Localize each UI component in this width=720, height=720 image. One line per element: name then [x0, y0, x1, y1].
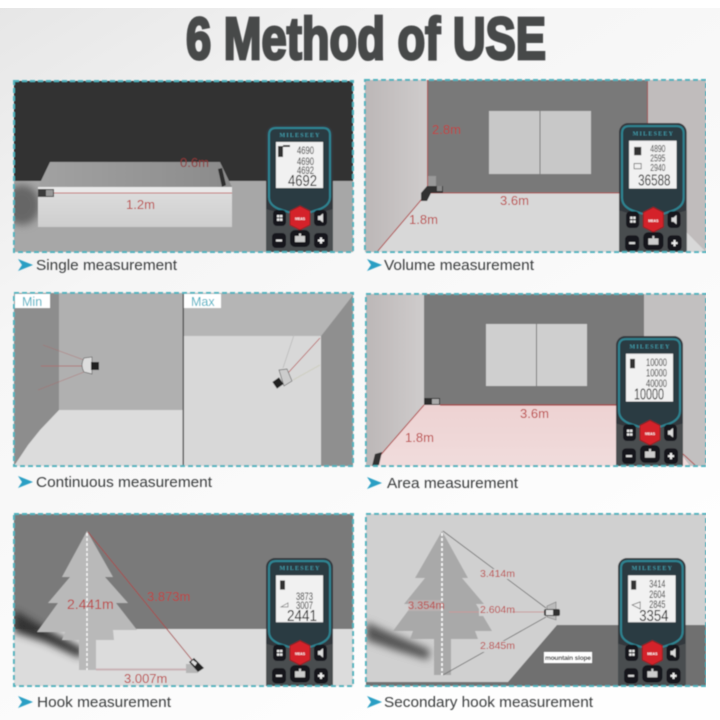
max floor	[184, 336, 321, 466]
device	[616, 336, 683, 476]
tree shadow	[14, 610, 85, 658]
device: 4690	[297, 156, 314, 168]
panel border	[366, 294, 706, 466]
mountain slope	[366, 625, 706, 686]
label: depth: 0.6m	[180, 155, 209, 170]
label: middle: 2.604m	[480, 604, 515, 616]
icon: meter on box top	[218, 168, 226, 187]
device: 4692	[288, 173, 317, 190]
min left wall	[14, 293, 59, 466]
icon: meter	[186, 658, 204, 673]
device: MILESEEY	[632, 566, 673, 572]
label: height: 2.8m	[432, 122, 461, 137]
label: width: 1.8m	[405, 430, 434, 445]
hypotenuse	[88, 532, 192, 660]
label: height: 3.354m	[408, 600, 445, 612]
panel border	[14, 293, 353, 466]
label: height: 2.441m	[67, 596, 114, 612]
panel: volume measurement	[365, 80, 706, 263]
label: lower: 2.845m	[480, 640, 515, 652]
device	[266, 558, 333, 696]
caption: volume: Volume measurement	[384, 257, 535, 274]
device: 10000	[646, 367, 667, 380]
panel: secondary hook measurement	[366, 514, 706, 696]
window	[489, 111, 591, 174]
device: 2595	[650, 153, 665, 165]
height line	[441, 533, 443, 675]
tree	[37, 531, 137, 670]
tag: min	[15, 294, 50, 309]
device: 3873	[296, 591, 313, 603]
device: 2940	[650, 163, 666, 174]
ground line	[96, 668, 190, 670]
device: MILESEEY	[630, 344, 670, 351]
min back wall	[59, 293, 184, 410]
label: base: 3.007m	[124, 671, 167, 686]
label: hypotenuse: 3.873m	[147, 589, 190, 604]
panel: area measurement	[366, 294, 706, 476]
laser lines	[443, 531, 546, 675]
device: MEAS	[647, 652, 658, 656]
label: length: 3.6m	[520, 406, 549, 421]
divider	[182, 293, 184, 466]
label: mountain slope	[544, 652, 592, 663]
device: MILESEEY	[280, 133, 320, 139]
device: MEAS	[295, 652, 306, 656]
tag: min: Min	[22, 295, 42, 309]
caption: secondary hook: Secondary hook measurement	[384, 694, 594, 711]
panel border	[365, 80, 706, 252]
device	[618, 558, 686, 696]
icon: meter on floor	[372, 452, 382, 466]
label: length: 3.6m	[500, 193, 529, 208]
device: 2441	[287, 608, 317, 625]
device: MEAS	[648, 219, 659, 223]
icon: min meter	[82, 357, 99, 374]
panel border	[14, 81, 353, 252]
label: length: 1.2m	[126, 197, 155, 212]
tag: max	[184, 294, 221, 309]
device: 3414	[649, 579, 665, 591]
panel: continuous measurement	[14, 293, 353, 466]
panel border	[14, 514, 353, 686]
label: upper: 3.414m	[480, 568, 515, 580]
device: 2845	[649, 599, 665, 611]
icon: meter on box front	[38, 189, 54, 197]
device	[266, 125, 333, 260]
box	[38, 162, 232, 227]
icon: meter in corner	[421, 176, 443, 201]
min laser lines	[38, 345, 84, 390]
max laser lines	[283, 335, 320, 380]
panel: single measurement	[4, 81, 353, 260]
caption: area: Area measurement	[387, 475, 519, 492]
device: 4692	[297, 165, 314, 177]
window	[486, 324, 587, 386]
device: 36588	[638, 172, 671, 189]
caption: continuous: Continuous measurement	[36, 474, 213, 491]
device: MILESEEY	[633, 131, 674, 138]
device: MILESEEY	[280, 566, 320, 572]
device: 3007	[296, 600, 313, 612]
tree	[393, 531, 492, 675]
caption: single: Single measurement	[36, 257, 178, 274]
label: mountain slope: mountain slope	[545, 655, 591, 662]
device: 10000	[646, 357, 667, 369]
device: 2604	[649, 589, 665, 601]
label: width: 1.8m	[409, 212, 438, 227]
floor shadow	[14, 181, 38, 229]
device: 3354	[639, 608, 669, 625]
icon: meter	[544, 602, 560, 620]
device: MEAS	[295, 217, 306, 221]
device: 4690	[297, 145, 314, 157]
icon: meter at corner	[424, 398, 440, 405]
device	[619, 123, 687, 263]
tag: max: Max	[191, 295, 215, 309]
device: 4890	[650, 144, 666, 155]
title: 6 Method of USE	[186, 6, 546, 72]
caption: hook: Hook measurement	[37, 694, 172, 711]
device: MEAS	[645, 432, 656, 436]
height line	[86, 533, 88, 670]
tree shadow	[366, 622, 430, 660]
panel border	[366, 514, 706, 686]
panel: hook measurement	[14, 514, 353, 696]
icon: max meter	[272, 369, 292, 389]
device: 10000	[634, 386, 664, 404]
device: 40000	[646, 378, 667, 390]
